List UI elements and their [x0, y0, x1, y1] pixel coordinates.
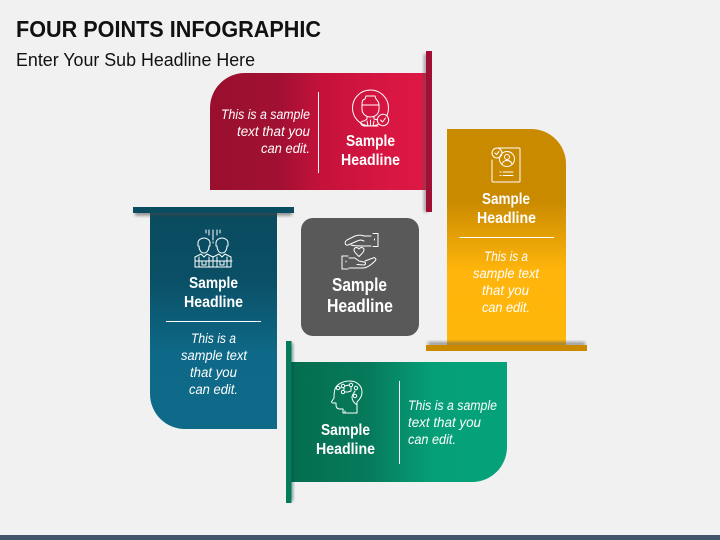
body text: yellow: This is a [484, 249, 528, 264]
bar shadow: red [424, 54, 428, 212]
icon: hands holding heart [342, 234, 378, 269]
headline: red [341, 133, 400, 169]
panel: center grey [301, 218, 419, 336]
body text: red: This is a sample [221, 107, 310, 122]
body text: red: text that you [237, 124, 310, 139]
body text: teal [181, 331, 248, 397]
headline: green: Sample [321, 422, 370, 439]
bar shadow: teal [135, 211, 292, 216]
icon: head with circuit brain [332, 381, 362, 413]
headline: teal: Sample [189, 275, 238, 292]
headline: yellow: Headline [477, 210, 536, 227]
headline: teal: Headline [184, 294, 243, 311]
body text: green: This is a sample [408, 398, 497, 413]
title: FOUR POINTS INFOGRAPHIC [16, 16, 321, 42]
icon: person with check [352, 90, 389, 126]
body text: yellow [473, 249, 540, 315]
headline: green [316, 422, 375, 458]
body text: yellow: can edit. [482, 300, 530, 315]
divider: red [318, 92, 319, 173]
bar shadow: yellow [428, 342, 585, 346]
panel: teal left [133, 207, 294, 429]
headline: teal [184, 275, 243, 311]
body text: yellow: that you [482, 283, 529, 298]
headline: red: Sample [346, 133, 395, 150]
bar: yellow [426, 345, 587, 351]
body text: green [408, 398, 497, 447]
body text: teal: can edit. [189, 382, 238, 397]
body text: red: can edit. [261, 141, 310, 156]
body text: teal: sample text [181, 348, 248, 363]
body text: yellow: sample text [473, 266, 540, 281]
headline: center [327, 275, 393, 316]
bar: teal [133, 207, 294, 213]
divider: green [399, 381, 400, 464]
panel: yellow right [426, 129, 587, 351]
body text: green: can edit. [408, 432, 456, 447]
headline: green: Headline [316, 441, 375, 458]
headline: yellow: Sample [482, 191, 530, 208]
icon: two people with headsets [195, 230, 232, 267]
subtitle: Enter Your Sub Headline Here [16, 50, 255, 70]
icon: document with profile [492, 148, 520, 182]
bar: red [426, 51, 432, 212]
body text: green: text that you [408, 415, 481, 430]
panel: red top [210, 51, 432, 212]
divider: teal [166, 321, 261, 322]
headline: red: Headline [341, 152, 400, 169]
body text: teal: that you [190, 365, 237, 380]
panel: green bottom [286, 341, 507, 503]
bar shadow: green [289, 343, 293, 501]
headline: center: Sample [332, 275, 387, 295]
bar: green [286, 341, 292, 503]
body text: red [221, 107, 310, 156]
headline: center: Headline [327, 296, 393, 316]
headline: yellow [477, 191, 536, 227]
divider: yellow [460, 237, 554, 238]
body text: teal: This is a [191, 331, 236, 346]
footer bar [0, 535, 720, 540]
